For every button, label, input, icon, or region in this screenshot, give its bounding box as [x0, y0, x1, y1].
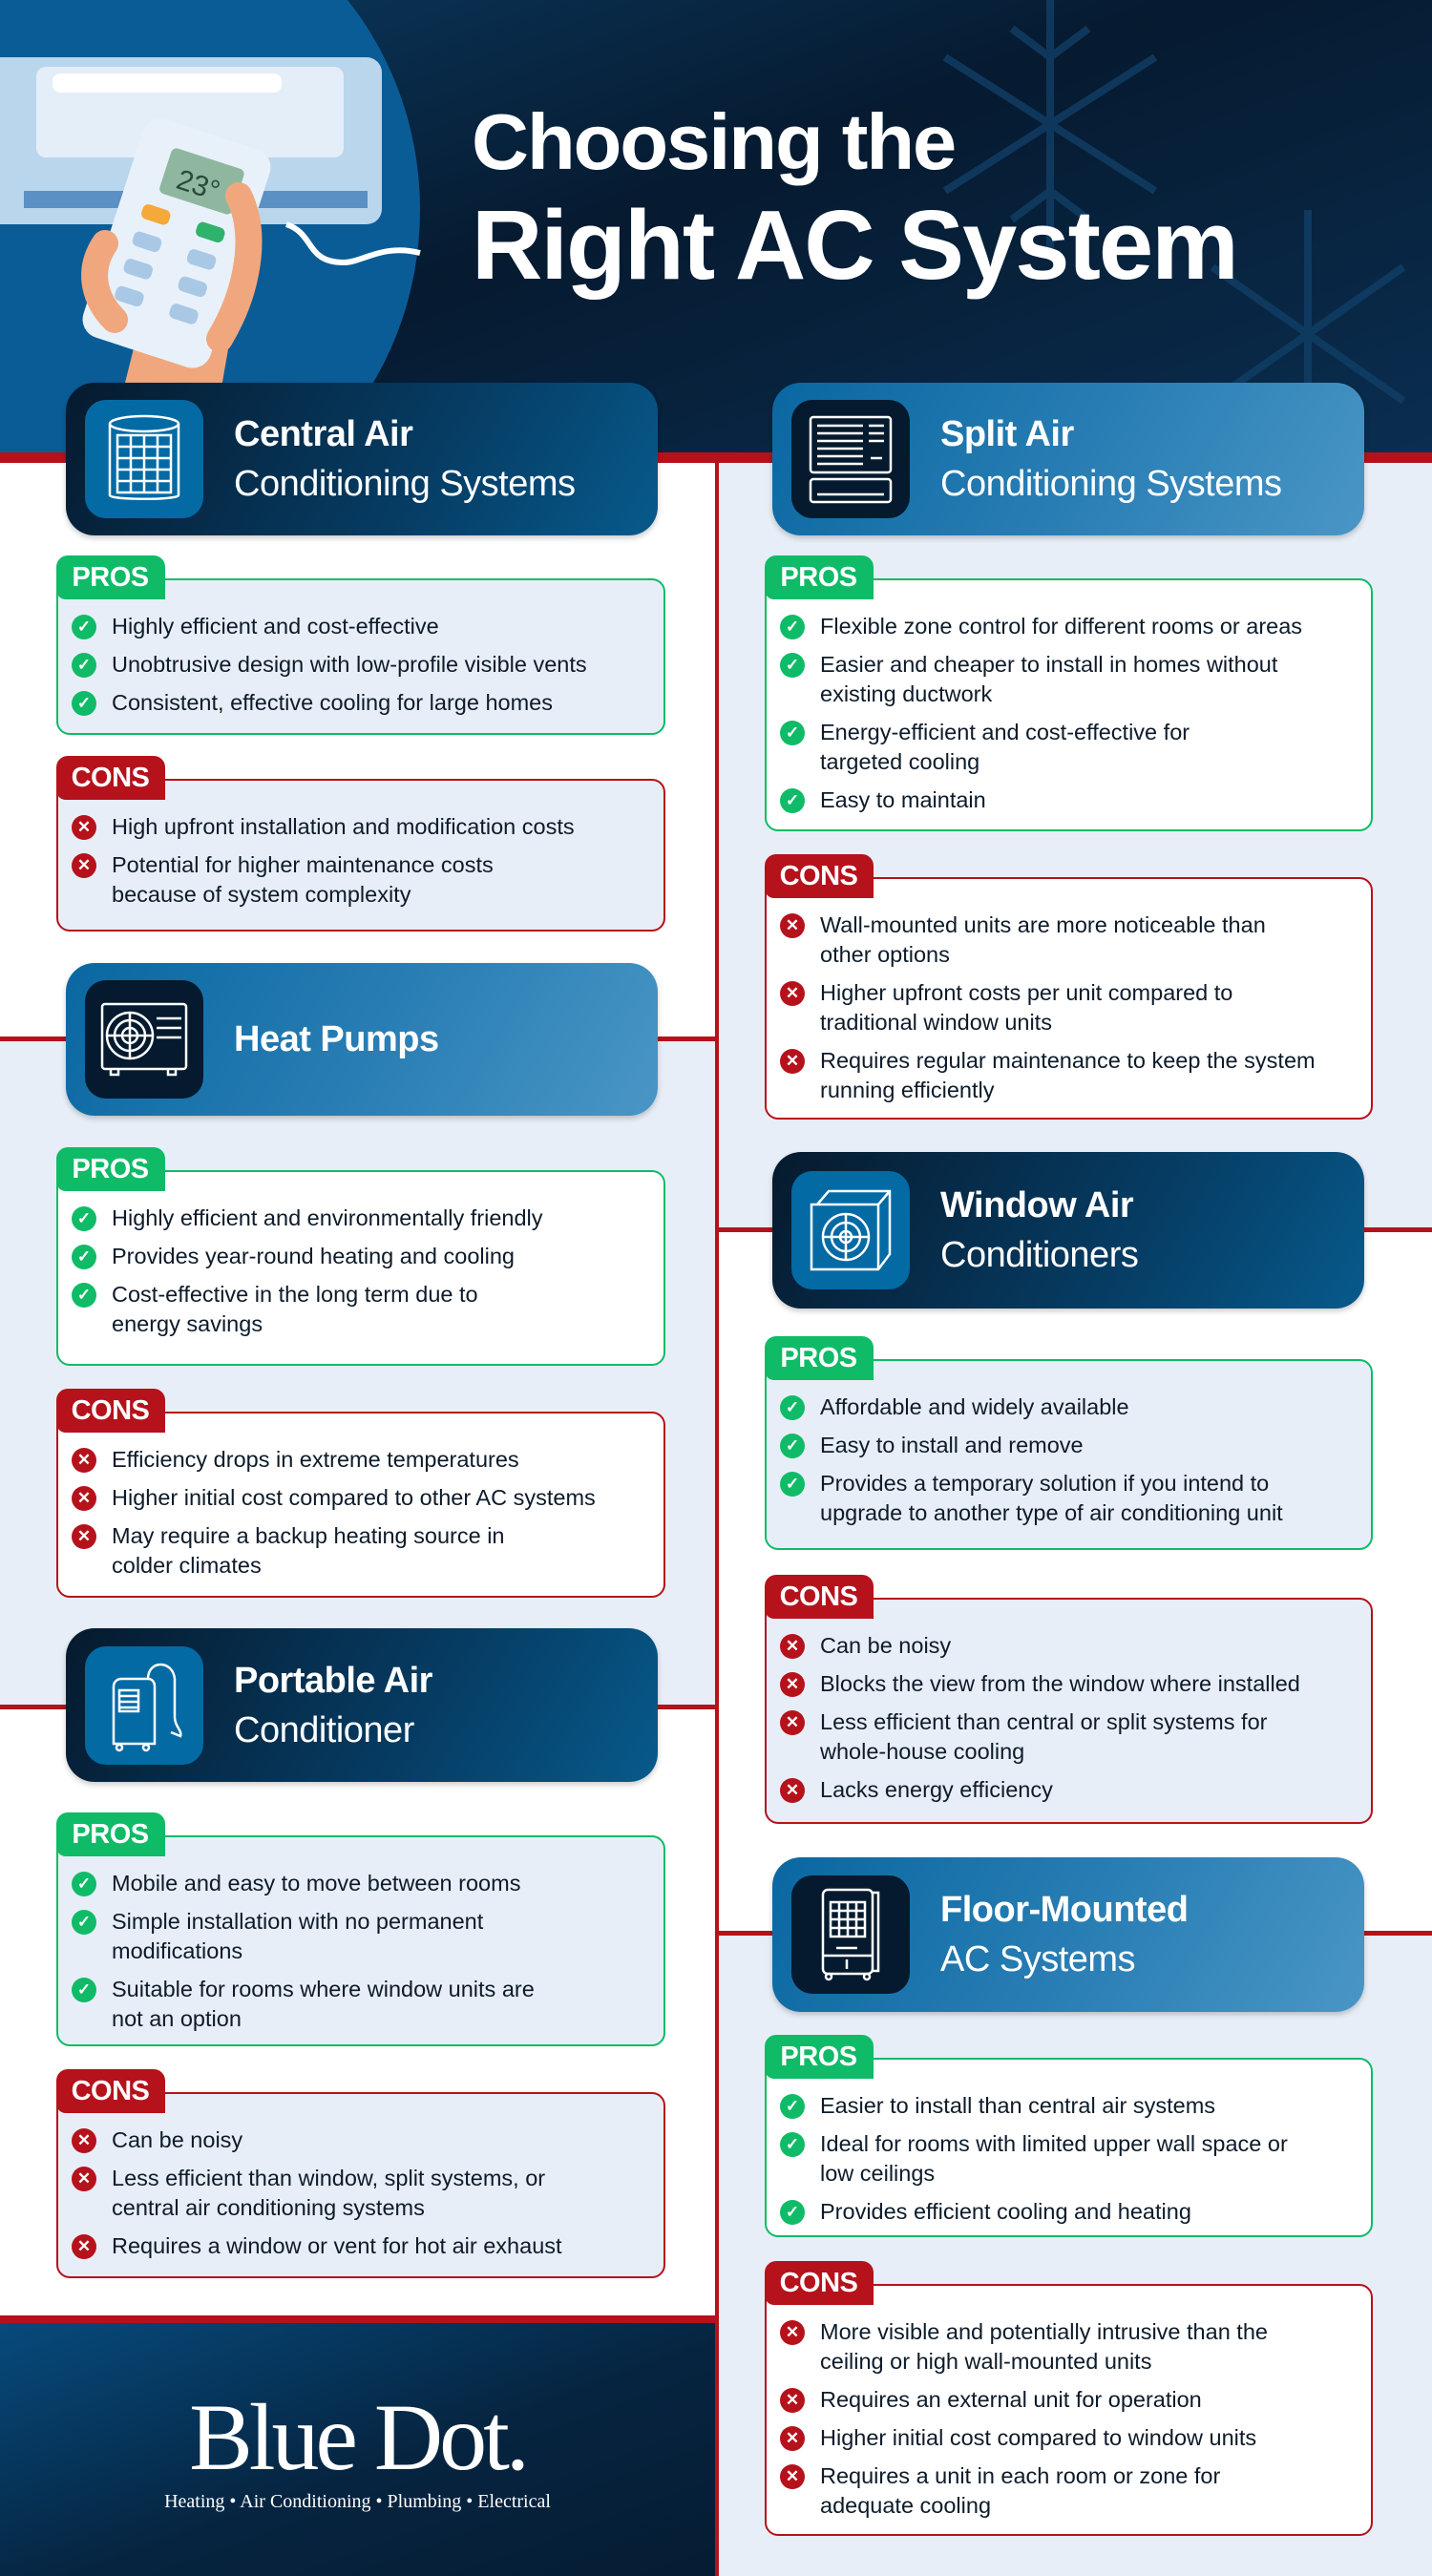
logo: Blue Dot.: [189, 2384, 526, 2490]
section header: Split Air: Split Air: [940, 414, 1074, 454]
panel: floor cons: Higher initial cost compared to window units: [820, 2425, 1256, 2450]
panel: central pros: Unobtrusive design with low-profile visible vents: [112, 652, 587, 677]
panel: floor cons: Requires a unit in each room or zone for: [820, 2463, 1220, 2488]
section header: Portable: Conditioner: [234, 1710, 414, 1750]
panel: split pros: targeted cooling: [820, 749, 979, 774]
panel: split cons: Requires regular maintenance to keep the system: [820, 1048, 1316, 1073]
panel: split cons: running efficiently: [820, 1078, 994, 1102]
panel: heat pros: ✓: [77, 1247, 91, 1266]
icon: window unit: [791, 1171, 910, 1289]
panel: split cons: other options: [820, 942, 950, 967]
panel: split cons: Wall-mounted units are more noticeable than: [820, 912, 1266, 937]
panel: window pros: ✓: [786, 1398, 799, 1416]
panel: portable cons: central air conditioning systems: [112, 2195, 425, 2220]
panel: floor cons: ✕: [786, 2323, 799, 2341]
title: Right AC System: [472, 190, 1237, 300]
section header: Central Air: Conditioning Systems: [234, 464, 576, 504]
panel: portable pros: modifications: [112, 1938, 242, 1963]
text: PROS: [72, 1819, 149, 1850]
panel: portable cons: Can be noisy: [112, 2127, 242, 2152]
panel: floor pros: [765, 2058, 1373, 2237]
section header: Floor-Mounted: AC Systems: [940, 1939, 1135, 1979]
panel: heat pros: ✓: [77, 1209, 91, 1227]
panel: window cons: ✕: [786, 1713, 799, 1731]
panel: portable cons: ✕: [77, 2169, 91, 2188]
red band: [0, 452, 1432, 463]
text: CONS: [72, 763, 149, 793]
panel: central pros: [56, 578, 665, 735]
panel: central cons: High upfront installation and modification costs: [112, 814, 575, 839]
panel: window cons: Can be noisy: [820, 1633, 951, 1658]
text: PROS: [72, 1154, 149, 1184]
text: CONS: [780, 2268, 857, 2298]
panel: window pros: upgrade to another type of air conditioning unit: [820, 1500, 1283, 1525]
panel: floor pros: ✓: [786, 2203, 799, 2221]
text: CONS: [72, 2076, 149, 2106]
text: PROS: [72, 562, 149, 593]
illustration: AC unit and remote: [0, 57, 421, 383]
text: CONS: [780, 1581, 857, 1612]
panel: window cons: whole-house cooling: [820, 1739, 1024, 1764]
illustration: AC unit and remote: 23°: [173, 164, 223, 207]
logo: Heating • Air Conditioning • Plumbing • Electrical: [164, 2491, 551, 2512]
panel: split pros: Energy-efficient and cost-effective for: [820, 720, 1190, 744]
panel: window cons: ✕: [786, 1637, 799, 1655]
panel: heat cons: ✕: [77, 1527, 91, 1545]
panel: portable pros: [56, 1835, 665, 2046]
panel: window pros: Affordable and widely available: [820, 1394, 1129, 1419]
title: [472, 97, 1237, 300]
panel: split pros: Easy to maintain: [820, 787, 986, 812]
panel: central cons: ✕: [77, 856, 91, 874]
text: CONS: [72, 1395, 149, 1426]
panel: split pros: ✓: [786, 618, 799, 636]
panel: heat pros: ✓: [77, 1286, 91, 1304]
panel: floor cons: More visible and potentially intrusive than the: [820, 2319, 1268, 2344]
panel: floor pros: Provides efficient cooling and heating: [820, 2199, 1191, 2224]
panel: window cons: ✕: [786, 1781, 799, 1799]
panel: portable pros: Simple installation with no permanent: [112, 1909, 483, 1934]
section header: Window Air: Conditioners: [940, 1235, 1138, 1275]
icon: split unit: [791, 400, 910, 518]
panel: portable cons: ✕: [77, 2237, 91, 2255]
icon: snowflakes: [943, 0, 1405, 404]
section header: Floor-Mounted: Floor-Mounted: [940, 1890, 1188, 1930]
panel: portable pros: Suitable for rooms where window units are: [112, 1977, 535, 2001]
panel: central cons: [56, 779, 665, 932]
panel: split pros: ✓: [786, 723, 799, 742]
panel: portable pros: ✓: [77, 1874, 91, 1893]
text: CONS: [780, 861, 857, 891]
panel: window pros: Provides a temporary solution if you intend to: [820, 1471, 1269, 1496]
panel: split cons: ✕: [786, 1052, 799, 1070]
icon: heat pump: [85, 980, 203, 1099]
panel: portable cons: Less efficient than window, split systems, or: [112, 2166, 545, 2190]
decorative blue blob: [0, 0, 420, 534]
panel: heat cons: colder climates: [112, 1553, 262, 1578]
panel: floor pros: Easier to install than central air systems: [820, 2093, 1215, 2118]
header background: [0, 0, 1432, 452]
panel: window pros: ✓: [786, 1436, 799, 1455]
panel: window cons: ✕: [786, 1675, 799, 1693]
panel: split pros: [765, 578, 1373, 831]
panel: central cons: Potential for higher maintenance costs: [112, 852, 494, 877]
section header: Window Air: Window Air: [940, 1185, 1133, 1225]
panel: window pros: ✓: [786, 1475, 799, 1493]
panel: split pros: existing ductwork: [820, 681, 992, 706]
panel: floor pros: ✓: [786, 2135, 799, 2153]
panel: split cons: ✕: [786, 916, 799, 934]
panel: split pros: ✓: [786, 656, 799, 674]
panel: heat pros: [56, 1170, 665, 1366]
section header: Split Air: Conditioning Systems: [940, 464, 1282, 504]
panel: window cons: Lacks energy efficiency: [820, 1777, 1053, 1802]
panel: portable pros: not an option: [112, 2006, 242, 2031]
panel: heat cons: Efficiency drops in extreme temperatures: [112, 1447, 519, 1472]
panel: heat pros: Cost-effective in the long term due to: [112, 1282, 478, 1307]
panel: heat pros: Provides year-round heating and cooling: [112, 1244, 515, 1268]
panel: portable pros: ✓: [77, 1913, 91, 1931]
panel: heat cons: ✕: [77, 1451, 91, 1469]
panel: heat cons: ✕: [77, 1489, 91, 1507]
column backgrounds: [0, 463, 715, 1038]
panel: central pros: ✓: [77, 618, 91, 636]
panel: window cons: [765, 1598, 1373, 1824]
panel: window pros: Easy to install and remove: [820, 1433, 1084, 1457]
panel: heat cons: Higher initial cost compared to other AC systems: [112, 1485, 596, 1510]
panel: split pros: Easier and cheaper to install in homes without: [820, 652, 1277, 677]
icon: central unit: [85, 400, 203, 518]
panel: heat cons: May require a backup heating source in: [112, 1523, 504, 1548]
panel: split cons: [765, 877, 1373, 1120]
panel: window cons: Less efficient than central or split systems for: [820, 1709, 1267, 1734]
section header: Heat Pumps: [66, 963, 658, 1116]
icon: floor unit: [791, 1875, 910, 1994]
section header: Floor-Mounted: [772, 1857, 1364, 2012]
panel: portable pros: ✓: [77, 1980, 91, 1999]
section header: Split Air: [772, 383, 1364, 535]
panel: floor cons: ceiling or high wall-mounted units: [820, 2349, 1151, 2374]
panel: floor cons: Requires an external unit for operation: [820, 2387, 1202, 2412]
text: PROS: [780, 562, 857, 593]
panel: window cons: Blocks the view from the window where installed: [820, 1671, 1300, 1696]
title: Choosing the: [472, 97, 955, 186]
panel: central pros: Consistent, effective cooling for large homes: [112, 690, 553, 715]
panel: split cons: Higher upfront costs per unit compared to: [820, 980, 1232, 1005]
panel: floor cons: ✕: [786, 2429, 799, 2447]
panel: central pros: ✓: [77, 656, 91, 674]
section header: Central Air: [66, 383, 658, 535]
icon: portable unit: [85, 1645, 203, 1764]
section header: Portable: Portable Air: [234, 1661, 432, 1701]
text: PROS: [780, 1343, 857, 1373]
text: PROS: [780, 2042, 857, 2072]
panel: central pros: Highly efficient and cost-effective: [112, 614, 439, 639]
panel: split cons: traditional window units: [820, 1010, 1052, 1035]
footer: logo panel: [0, 2315, 715, 2576]
panel: split pros: ✓: [786, 791, 799, 809]
section header: Portable: [66, 1628, 658, 1782]
panel: central pros: ✓: [77, 694, 91, 712]
panel: portable pros: Mobile and easy to move between rooms: [112, 1871, 520, 1895]
panel: window pros: [765, 1359, 1373, 1550]
section header: Heat Pumps: Heat Pumps: [234, 1019, 439, 1059]
panel: central cons: ✕: [77, 818, 91, 836]
panel: heat pros: Highly efficient and environmentally friendly: [112, 1205, 543, 1230]
panel: split cons: ✕: [786, 984, 799, 1002]
section header: Window Air: [772, 1152, 1364, 1309]
panel: floor cons: adequate cooling: [820, 2493, 991, 2518]
panel: floor cons: ✕: [786, 2467, 799, 2485]
panel: floor pros: ✓: [786, 2097, 799, 2115]
panel: floor cons: [765, 2284, 1373, 2536]
panel: split pros: Flexible zone control for different rooms or areas: [820, 614, 1302, 639]
panel: portable cons: Requires a window or vent for hot air exhaust: [112, 2233, 562, 2258]
panel: floor cons: ✕: [786, 2391, 799, 2409]
panel: floor pros: Ideal for rooms with limited upper wall space or: [820, 2131, 1288, 2156]
panel: heat pros: energy savings: [112, 1311, 263, 1336]
panel: heat cons: [56, 1412, 665, 1598]
panel: portable cons: ✕: [77, 2131, 91, 2149]
panel: portable cons: [56, 2092, 665, 2278]
panel: central cons: because of system complexity: [112, 882, 411, 907]
panel: floor pros: low ceilings: [820, 2161, 935, 2186]
section header: Central Air: Central Air: [234, 414, 412, 454]
